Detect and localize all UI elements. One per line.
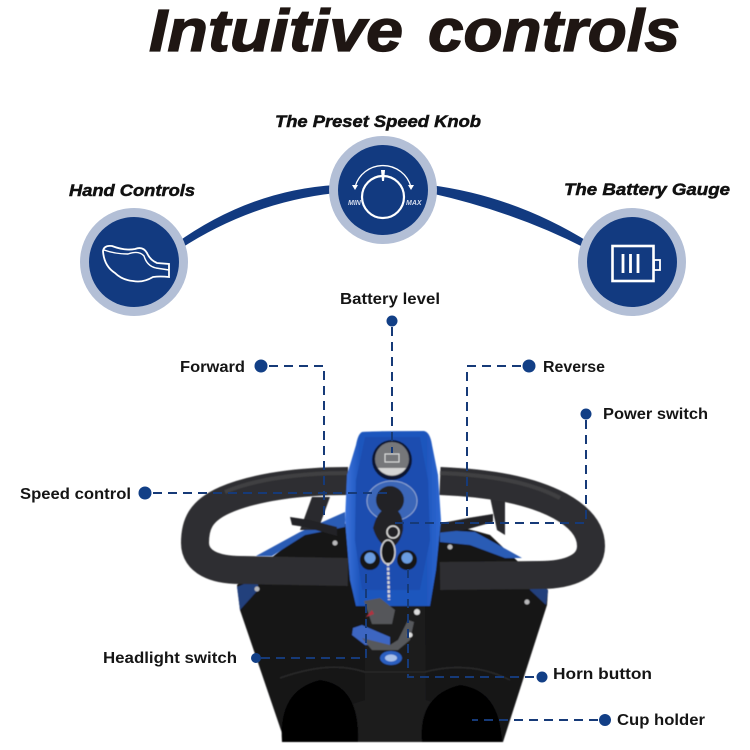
key fob [352, 598, 420, 650]
speed knob [367, 481, 417, 521]
heading: hand controls: Hand Controls [69, 182, 195, 200]
buttons [360, 550, 417, 570]
icon: hand controls [80, 208, 188, 316]
label: battery level [340, 291, 440, 326]
brake levers [290, 517, 337, 536]
heading: preset speed knob: The Preset Speed Knob [275, 113, 481, 131]
title [149, 0, 680, 64]
rear body panel [237, 520, 548, 742]
label: battery level: Battery level [340, 291, 440, 308]
icon: speed knob: MAX [406, 200, 423, 207]
label: cup holder: Cup holder [617, 712, 705, 729]
label: forward: Forward [180, 359, 245, 376]
icon: speed knob: MIN [348, 200, 362, 207]
label: reverse: Reverse [543, 359, 605, 376]
label: horn button: Horn button [553, 666, 652, 683]
scooter photo [195, 431, 591, 742]
icon: battery [578, 208, 686, 316]
icon: speed knob [329, 136, 437, 244]
logo badge [380, 651, 402, 665]
key switch [373, 507, 403, 600]
blue frame [256, 512, 522, 558]
connecting arc [175, 185, 590, 249]
handlebar stems [300, 497, 505, 535]
leader lines [153, 327, 598, 720]
label: speed control: Speed control [20, 486, 131, 503]
label: headlight switch: Headlight switch [103, 650, 237, 667]
cup holders [282, 680, 502, 742]
label: forward [180, 359, 268, 376]
screws [254, 540, 530, 604]
battery gauge dial [372, 440, 412, 480]
control console [345, 431, 441, 606]
handlebar [195, 481, 591, 576]
label: power switch: Power switch [603, 406, 708, 423]
heading: battery gauge: The Battery Gauge [564, 181, 730, 199]
